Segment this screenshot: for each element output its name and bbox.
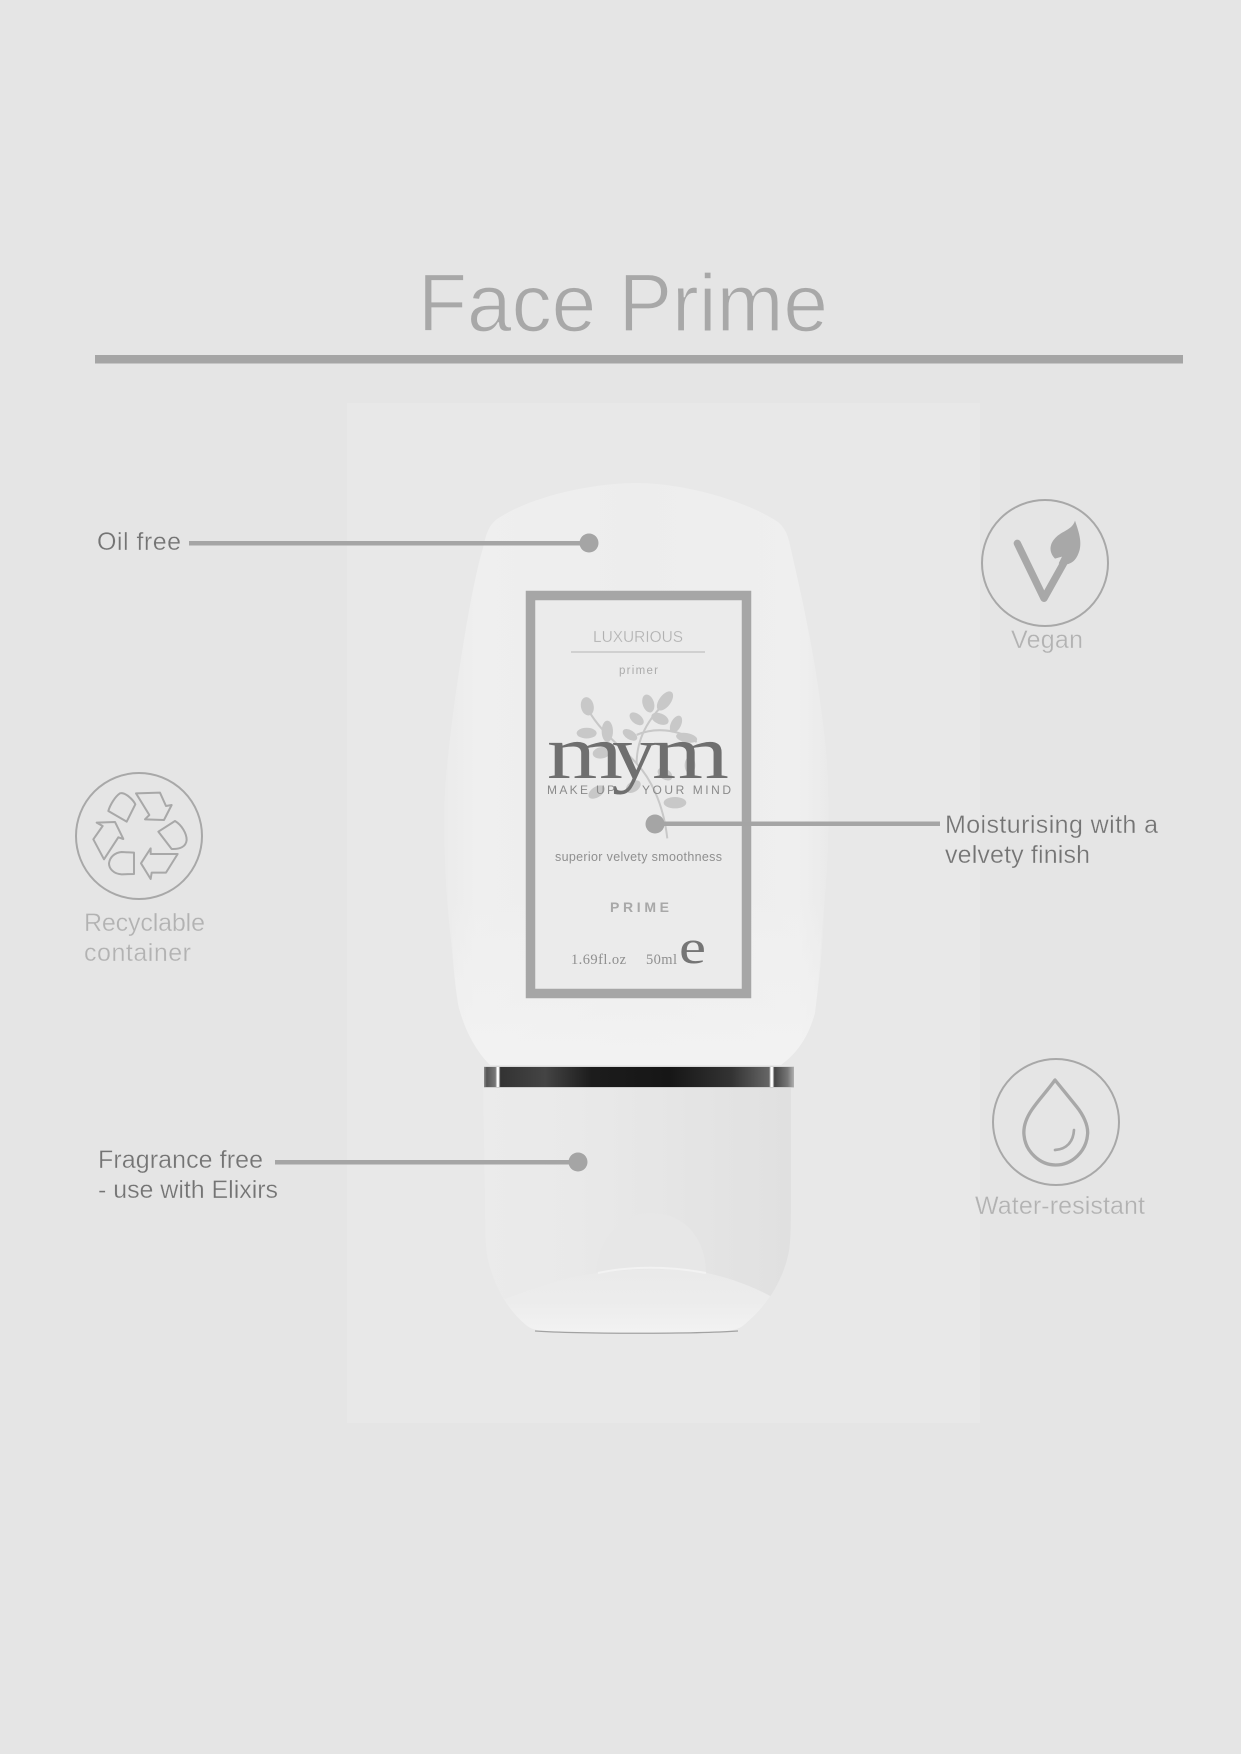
- product label: [530, 596, 746, 994]
- label volume metric: 50ml: [646, 952, 677, 968]
- label: recyclable container: container: [84, 939, 191, 967]
- chrome band: [484, 1066, 794, 1088]
- label product type: primer: [619, 665, 658, 677]
- icon: recyclable: [76, 773, 202, 899]
- title rule: [95, 355, 1183, 364]
- label name: PRIME: [610, 899, 669, 915]
- brand logo: [547, 711, 729, 795]
- callout: moisturising: [646, 811, 1158, 869]
- label volume imperial: 1.69fl.oz: [571, 952, 627, 968]
- label: recyclable container: [84, 909, 205, 967]
- brand tagline right: YOUR MIND: [642, 783, 731, 797]
- bottle cap: [524, 1267, 745, 1334]
- callout: fragrance free: - use with Elixirs: [98, 1176, 278, 1204]
- brand logo: m: [547, 711, 623, 795]
- icon: vegan: [982, 500, 1108, 626]
- brand logo: y: [612, 711, 656, 795]
- label heading underline: [571, 652, 705, 653]
- panel: faint product backdrop: [347, 403, 980, 1423]
- label leaf illustration: [577, 688, 698, 838]
- estimated sign: e: [679, 921, 706, 974]
- bottle body: [444, 483, 829, 1065]
- label small heading: LUXURIOUS: [593, 629, 683, 646]
- icon: water-resistant: [993, 1059, 1119, 1185]
- title: Face Prime: [418, 258, 828, 349]
- callout: moisturising: velvety finish: [945, 841, 1090, 869]
- label: vegan: Vegan: [1011, 626, 1083, 654]
- label: water-resistant: Water-resistant: [975, 1192, 1145, 1220]
- label: recyclable container: Recyclable: [84, 909, 205, 937]
- callout: oil free: [97, 528, 598, 556]
- brand tagline left: MAKE UP: [547, 783, 615, 797]
- label descriptor: superior velvety smoothness: [555, 850, 722, 864]
- brand logo: m: [652, 711, 729, 795]
- label frame: [530, 596, 746, 994]
- callout: moisturising: Moisturising with a: [945, 811, 1158, 839]
- product: bottle: [458, 957, 816, 1334]
- callout: oil free: Oil free: [97, 528, 181, 556]
- callout: fragrance free: [98, 1146, 588, 1204]
- callout: fragrance free: Fragrance free: [98, 1146, 263, 1174]
